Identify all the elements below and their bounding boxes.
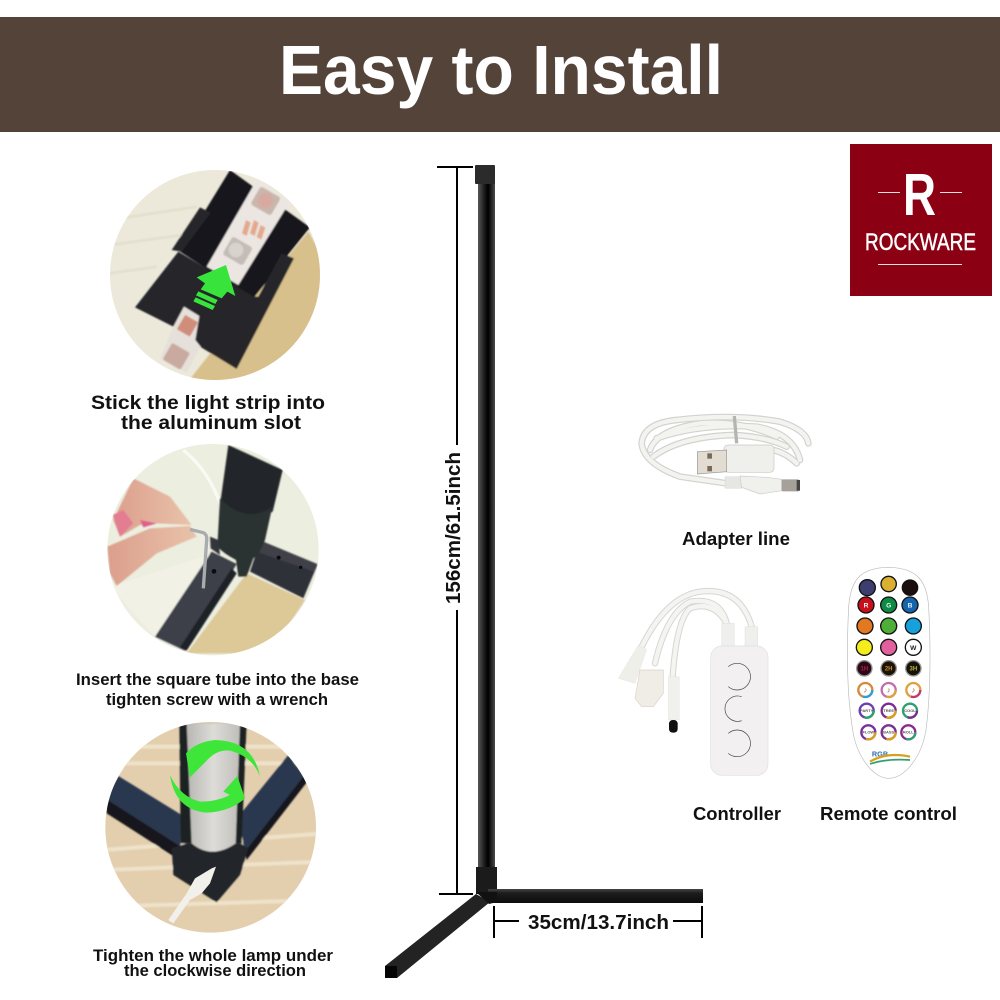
icon: remote control: COOL [904, 708, 916, 713]
icon: remote control: RGB [872, 750, 888, 759]
caption: stick the light strip: Stick the light strip into [91, 393, 325, 414]
width label: 35cm/13.7inch [528, 912, 669, 934]
icon: remote control: B [908, 603, 913, 610]
icon: remote control [847, 567, 930, 778]
photo: square tube into base with wrench [103, 440, 323, 660]
icon: remote control: 1H [861, 666, 868, 672]
label: remote control: Remote control [820, 804, 957, 824]
caption: tighten the whole lamp [93, 946, 333, 980]
floor lamp [385, 165, 703, 978]
caption: insert the square tube: Insert the square tube into the base [76, 670, 359, 689]
icon: remote control: 3H [910, 666, 917, 672]
icon: remote control: ♪ [911, 686, 915, 695]
icon: remote control: FLOW [862, 730, 874, 735]
header banner [0, 17, 1000, 132]
icon: remote control: R [864, 603, 869, 610]
title: Easy to Install [279, 31, 723, 109]
height label: 156cm/61.5inch [443, 452, 465, 604]
label: controller: Controller [693, 804, 781, 824]
photo: light strip into aluminum slot [107, 167, 330, 383]
caption: stick the light strip [91, 393, 325, 434]
icon: remote control: W [910, 645, 917, 652]
icon: controller [618, 591, 768, 775]
icon: remote control: G [886, 603, 891, 610]
caption: tighten the whole lamp: Tighten the whole lamp under [93, 946, 333, 965]
caption: insert the square tube [76, 670, 359, 709]
icon: remote control: ROLL [903, 730, 914, 735]
photo: tighten the lamp clockwise [103, 720, 323, 937]
icon: remote control: ♪ [887, 686, 891, 695]
caption: insert the square tube: tighten screw with a wrench [106, 690, 328, 709]
icon: remote control: BASS [883, 730, 895, 735]
icon: USB adapter cable [642, 416, 808, 494]
icon: remote control: TREE [883, 708, 894, 713]
icon: remote control: PARTY [860, 708, 874, 713]
logo: ROCKWARE [850, 144, 992, 296]
caption: stick the light strip: the aluminum slot [121, 413, 302, 434]
label: adapter line: Adapter line [682, 529, 790, 549]
icon: remote control: ♪ [863, 686, 867, 695]
logo: ROCKWARE: R [903, 162, 936, 228]
icon: remote control: 2H [885, 666, 892, 672]
caption: tighten the whole lamp: the clockwise direction [124, 961, 306, 980]
